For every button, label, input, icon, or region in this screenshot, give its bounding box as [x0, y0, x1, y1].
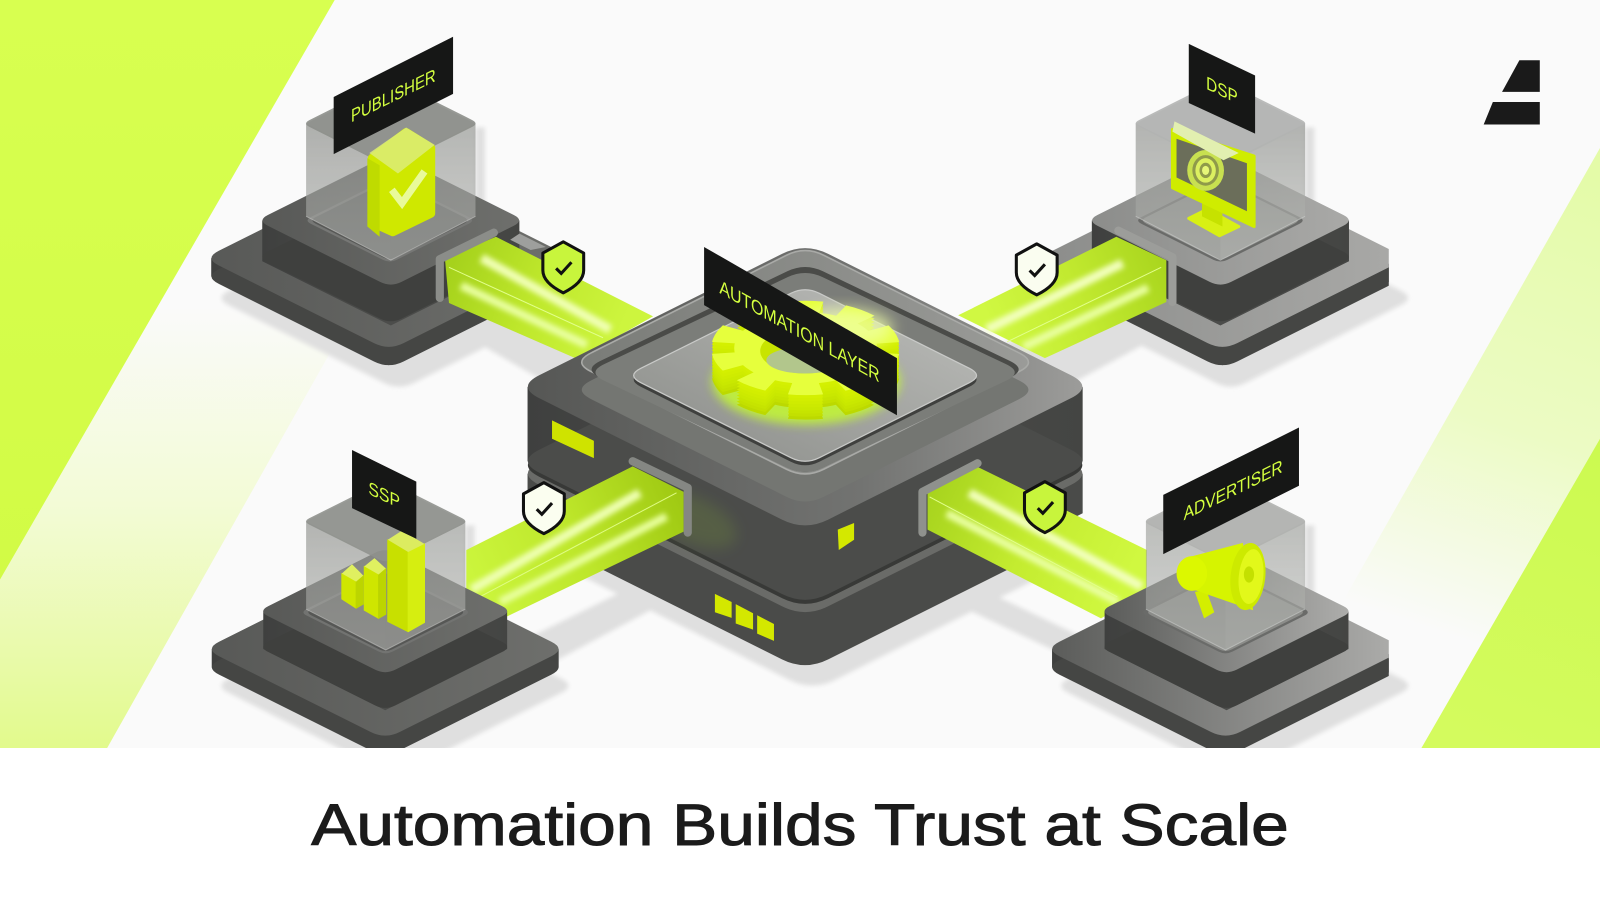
- tube: publisher to center: [440, 233, 653, 359]
- icon: monitor with target: [1172, 121, 1254, 236]
- label: publisher: PUBLISHER: [351, 65, 436, 127]
- gear glow: [706, 362, 906, 432]
- title: Automation Builds Trust at Scale: [311, 793, 1289, 858]
- label: advertiser: [1163, 428, 1299, 554]
- icon: clipboard check: [367, 128, 435, 237]
- node: DSP: [1045, 81, 1400, 365]
- label: DSP: [1189, 44, 1255, 134]
- node: SSP: [212, 482, 559, 754]
- label: automation layer: [704, 247, 897, 415]
- shield: publisher link: [543, 242, 584, 293]
- tube: advertiser to center: [922, 463, 1147, 618]
- central automation layer block: [528, 248, 1083, 665]
- DSP middle block: [1092, 156, 1349, 326]
- DSP base slab: [1052, 229, 1389, 366]
- tube: DSP to center: [958, 231, 1172, 358]
- advertiser base slab: [1052, 619, 1389, 748]
- icon: gear: [710, 300, 901, 420]
- shield: advertiser link: [1024, 482, 1065, 533]
- label: SSP: SSP: [368, 479, 400, 513]
- publisher base slab: [211, 229, 551, 366]
- logo: [1484, 60, 1540, 124]
- center lower slab: [528, 335, 1083, 665]
- shield: DSP link: [1016, 244, 1057, 295]
- label: automation layer: AUTOMATION LAYER: [719, 276, 880, 387]
- label: SSP: [352, 450, 416, 539]
- node: advertiser: [1052, 482, 1399, 754]
- SSP glass case: [306, 482, 465, 650]
- advertiser glass case: [1146, 501, 1306, 650]
- publisher middle block: [262, 156, 519, 326]
- publisher glass case: [306, 102, 476, 261]
- label: publisher: [334, 37, 453, 154]
- SSP base slab: [212, 562, 559, 754]
- shield: SSP link: [523, 483, 564, 534]
- glass plate: [634, 290, 977, 465]
- tube: SSP to center: [466, 461, 688, 616]
- advertiser middle block: [1104, 567, 1348, 710]
- center upper block: [528, 248, 1083, 604]
- icon: bar chart: [342, 531, 424, 632]
- node: publisher: [211, 102, 551, 366]
- background: right lime wedge: [1337, 148, 1600, 748]
- glass frame: [582, 251, 1028, 501]
- SSP middle block: [263, 550, 507, 710]
- label: DSP: DSP: [1206, 73, 1238, 109]
- background: left lime wedge: [0, 0, 335, 748]
- indicator lights: [552, 420, 854, 641]
- DSP glass case: [1136, 81, 1305, 260]
- label: advertiser: ADVERTISER: [1184, 456, 1283, 525]
- icon: megaphone: [1177, 541, 1269, 618]
- cast shadows: [222, 128, 1408, 772]
